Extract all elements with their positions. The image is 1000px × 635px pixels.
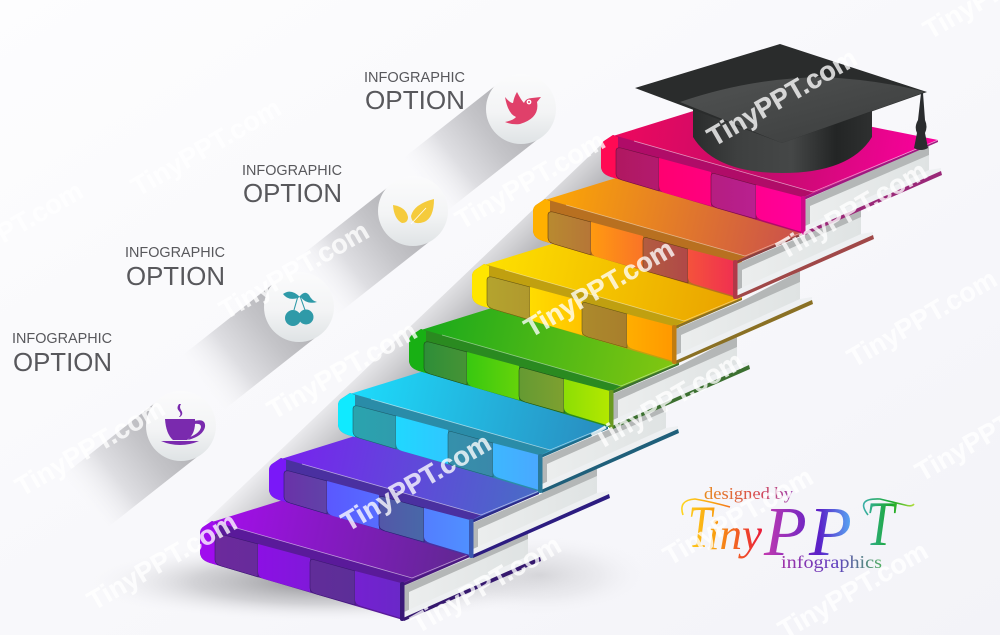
tassel (914, 93, 928, 150)
watermarks: TinyPPT.com (262, 315, 422, 425)
logo: designed by TinyPPT infographics: designed by (704, 484, 794, 503)
watermarks: TinyPPT.com (842, 263, 1000, 373)
option label 1 (364, 70, 465, 115)
icon: coffee cup (161, 404, 205, 445)
icon: leaves (393, 199, 434, 224)
circle: leaf (378, 176, 448, 246)
shadow band: cherry (160, 280, 320, 427)
shadow band: coffee (42, 399, 202, 546)
watermarks: TinyPPT.com (588, 345, 748, 455)
option label 3: INFOGRAPHIC (125, 245, 225, 261)
option label 4 (12, 331, 112, 377)
circle: coffee (146, 391, 216, 461)
logo: designed by TinyPPT infographics: P (763, 494, 807, 571)
book 6 orange (533, 163, 874, 299)
option label 3: OPTION (126, 261, 225, 291)
circle: cherry (264, 272, 334, 342)
logo: designed by TinyPPT infographics (682, 484, 914, 572)
book 1 purple (200, 485, 541, 621)
book 4 green (409, 293, 750, 429)
option label 3 (125, 245, 225, 291)
watermarks: TinyPPT.com (126, 92, 286, 202)
watermarks: TinyPPT.com (519, 233, 679, 343)
option label 4: INFOGRAPHIC (12, 331, 112, 347)
icon: cherries (283, 292, 317, 326)
logo: designed by TinyPPT infographics: P (808, 494, 852, 571)
option label 1: INFOGRAPHIC (364, 70, 465, 86)
shadow band: bird (382, 82, 542, 229)
logo: designed by TinyPPT infographics: iny (707, 510, 762, 559)
watermarks: TinyPPT.com (336, 427, 496, 537)
logo: designed by TinyPPT infographics: infographics (781, 552, 882, 572)
watermarks: TinyPPT.com (772, 155, 932, 265)
option label 1: OPTION (365, 85, 465, 115)
watermarks: TinyPPT.com (10, 392, 170, 502)
shadow band: leaf (274, 184, 434, 331)
watermarks: TinyPPT.com (658, 461, 818, 571)
watermarks: TinyPPT.com (214, 215, 374, 325)
book 3 cyan (338, 357, 679, 493)
ground shadow (87, 535, 650, 622)
watermarks: TinyPPT.com (450, 125, 610, 235)
graduation cap (635, 44, 928, 173)
staircase shadow (205, 143, 720, 560)
book 5 yellow (472, 228, 813, 364)
logo: designed by TinyPPT infographics: T (688, 494, 715, 560)
book 7 pink (601, 99, 942, 235)
logo: designed by TinyPPT infographics: T (866, 488, 897, 559)
icon: bird (505, 92, 541, 124)
circle: bird (486, 74, 556, 144)
option label 2: INFOGRAPHIC (242, 163, 342, 179)
option label 4: OPTION (13, 347, 112, 377)
watermarks: TinyPPT.com (82, 506, 242, 616)
option label 2: OPTION (243, 178, 342, 208)
book 2 violet (269, 422, 610, 558)
watermarks: TinyPPT.com (702, 42, 862, 152)
option label 2 (242, 163, 342, 208)
